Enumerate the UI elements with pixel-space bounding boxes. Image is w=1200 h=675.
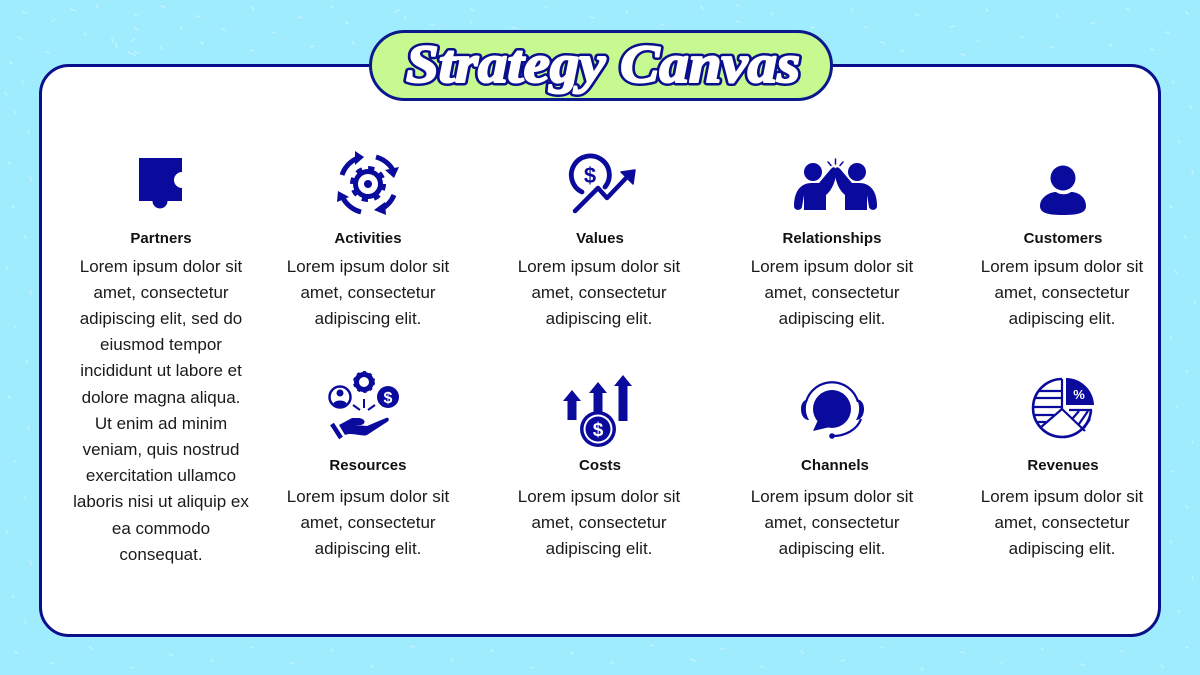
icon: costs coin with arrows: $ bbox=[593, 420, 604, 441]
title: Strategy Canvas bbox=[406, 34, 800, 94]
heading: Revenues: Revenues bbox=[1027, 457, 1099, 474]
text: Costs description: adipiscing elit. bbox=[546, 539, 652, 558]
text: Partners description: amet, consectetur bbox=[93, 283, 229, 302]
heading: Relationships: Relationships bbox=[782, 230, 882, 247]
panel: main canvas bbox=[39, 64, 1161, 637]
text: Partners description: veniam, quis nostrud bbox=[83, 440, 239, 459]
text: Partners description: eiusmod tempor bbox=[100, 335, 222, 354]
heading: Customers: Customers bbox=[1024, 230, 1102, 247]
text: Costs description bbox=[518, 486, 680, 558]
text: Channels description: adipiscing elit. bbox=[779, 539, 885, 558]
text: Revenues description: adipiscing elit. bbox=[1009, 539, 1115, 558]
text: Values description: Lorem ipsum dolor sit bbox=[518, 256, 680, 276]
text: Customers description: adipiscing elit. bbox=[1009, 309, 1115, 328]
text: Resources description: amet, consectetur bbox=[300, 513, 436, 532]
text: Activities description: adipiscing elit. bbox=[315, 309, 421, 328]
text: Revenues description: amet, consectetur bbox=[994, 513, 1130, 532]
text: Relationships description: adipiscing elit. bbox=[779, 309, 885, 328]
text: Revenues description: Lorem ipsum dolor sit bbox=[981, 486, 1143, 506]
text: Partners description bbox=[73, 256, 249, 564]
icon: resources hand with gear, person and dollar: $ bbox=[384, 390, 393, 407]
text: Resources description: Lorem ipsum dolor sit bbox=[287, 486, 449, 506]
text: Partners description: exercitation ullamco bbox=[86, 466, 236, 485]
text: Partners description: Ut enim ad minim bbox=[95, 414, 227, 433]
heading: Resources: Resources bbox=[329, 457, 407, 474]
text: Partners description: ea commodo bbox=[112, 519, 210, 538]
text: Relationships description bbox=[751, 256, 914, 328]
text: Channels description: amet, consectetur bbox=[764, 513, 900, 532]
text: Customers description: amet, consectetur bbox=[994, 283, 1130, 302]
text: Partners description: Lorem ipsum dolor sit bbox=[80, 256, 242, 276]
text: Channels description: Lorem ipsum dolor sit bbox=[751, 486, 913, 506]
text: Revenues description bbox=[981, 486, 1144, 558]
heading: Activities: Activities bbox=[334, 230, 402, 247]
text: Relationships description: amet, consectetur bbox=[764, 283, 900, 302]
text: Activities description: amet, consectetur bbox=[300, 283, 436, 302]
text: Customers description: Lorem ipsum dolor sit bbox=[981, 256, 1143, 276]
text: Relationships description: Lorem ipsum dolor sit bbox=[751, 256, 913, 276]
heading: Costs: Costs bbox=[579, 457, 621, 474]
text: Customers description bbox=[981, 256, 1144, 328]
text: Resources description bbox=[287, 486, 450, 558]
text: Partners description: laboris nisi ut aliquip ex bbox=[73, 492, 249, 511]
text: Costs description: amet, consectetur bbox=[531, 513, 667, 532]
icon: values dollar and rising arrow: $ bbox=[584, 163, 596, 188]
heading: Values: Values bbox=[576, 230, 624, 247]
text: Values description: amet, consectetur bbox=[531, 283, 667, 302]
text: Channels description bbox=[751, 486, 914, 558]
heading: Channels: Channels bbox=[801, 457, 869, 474]
text: Activities description: Lorem ipsum dolor sit bbox=[287, 256, 449, 276]
text: Partners description: consequat. bbox=[119, 545, 203, 564]
text: Partners description: dolore magna aliqua. bbox=[82, 388, 240, 407]
title pill background bbox=[369, 30, 833, 101]
heading: Partners: Partners bbox=[130, 230, 192, 247]
text: Costs description: Lorem ipsum dolor sit bbox=[518, 486, 680, 506]
text: Values description bbox=[518, 256, 680, 328]
text: Values description: adipiscing elit. bbox=[546, 309, 652, 328]
text: Partners description: incididunt ut labore et bbox=[80, 361, 242, 380]
title: Strategy Canvas bbox=[406, 34, 800, 94]
icon: revenues pie chart with percent: % bbox=[1073, 387, 1085, 402]
text: Partners description: adipiscing elit, sed do bbox=[80, 309, 242, 328]
text: Activities description bbox=[287, 256, 450, 328]
text: Resources description: adipiscing elit. bbox=[315, 539, 421, 558]
